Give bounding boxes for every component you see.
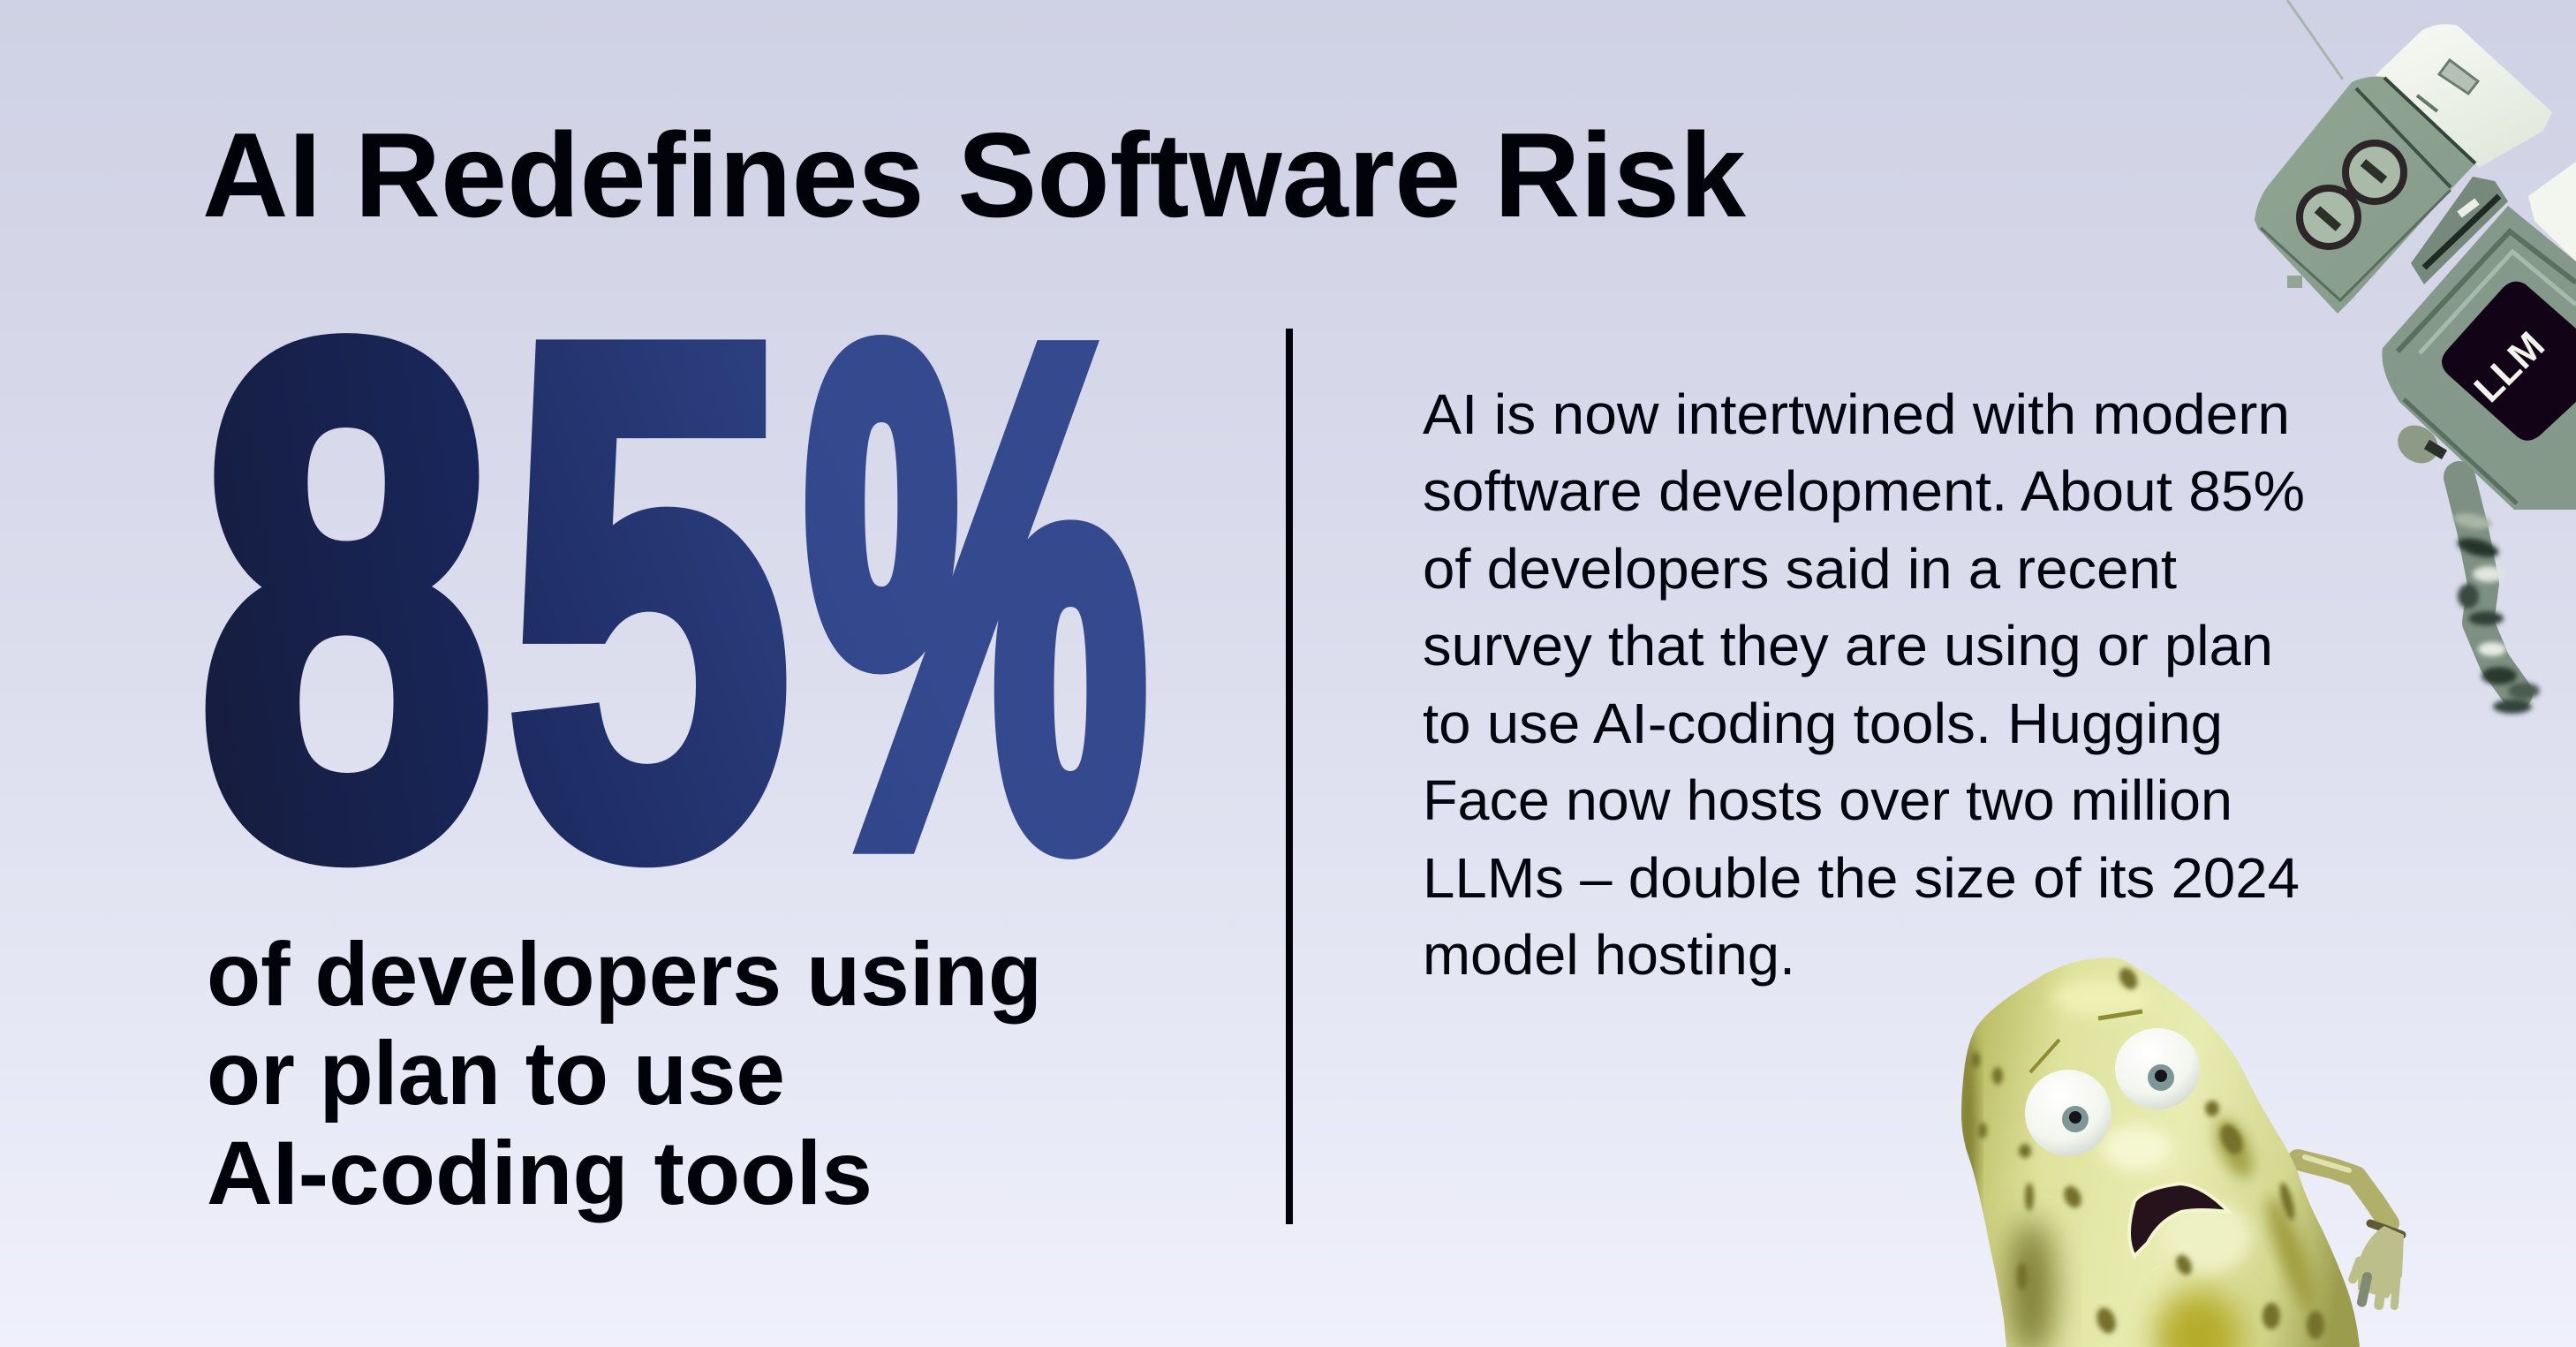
robot eye left [2300, 188, 2358, 246]
robot body top [2528, 162, 2576, 261]
robot head top [2376, 24, 2552, 168]
pickle eye left [2025, 1070, 2111, 1156]
subheading: of developers using or plan to use AI-coding tools: of developers using [207, 924, 1042, 1025]
body paragraph: LLMs – double the size of its 2024 [1423, 846, 2300, 910]
illustration: worried pickle [1943, 945, 2404, 1347]
robot body [2382, 206, 2576, 510]
body paragraph [1423, 382, 2305, 987]
big statistic: 85%: 8 [198, 197, 495, 1002]
title: AI Redefines Software Risk [202, 108, 1746, 242]
robot shoulder [2391, 418, 2445, 471]
LLM screen [2442, 282, 2576, 441]
big statistic: 85% [198, 197, 1146, 1002]
robot head face [2255, 77, 2475, 314]
pickle eye right [2115, 1028, 2200, 1109]
body paragraph: of developers said in a recent [1423, 537, 2177, 601]
LLM screen: LLM [2466, 323, 2553, 411]
body paragraph: model hosting. [1423, 923, 1795, 987]
pickle leg [2006, 1316, 2031, 1347]
body paragraph: to use AI-coding tools. Hugging [1423, 692, 2223, 755]
pickle arm [2298, 1157, 2389, 1223]
pickle wristband [2370, 1223, 2402, 1235]
subheading: of developers using or plan to use AI-coding tools: AI-coding tools [207, 1123, 873, 1223]
body paragraph: Face now hosts over two million [1423, 768, 2232, 832]
body paragraph: survey that they are using or plan [1423, 614, 2273, 677]
pickle hand [2347, 1226, 2404, 1311]
robot neck [2411, 177, 2508, 284]
subheading: of developers using or plan to use AI-coding tools: or plan to use [207, 1023, 785, 1124]
subheading: of developers using or plan to use AI-coding tools [207, 924, 1042, 1223]
big statistic: 85%: % [805, 207, 1146, 984]
big statistic: 85%: 5 [506, 197, 791, 1002]
divider line [1286, 329, 1293, 1224]
pickle eyebrow right [2098, 1011, 2142, 1018]
robot eye right [2346, 143, 2404, 201]
body paragraph: AI is now intertwined with modern [1423, 382, 2290, 446]
illustration: LLM robot [2255, 0, 2576, 714]
robot head tab [2287, 276, 2302, 288]
pickle mouth [2129, 1184, 2229, 1256]
pickle body [1961, 957, 2360, 1347]
pickle eyebrow left [2030, 1040, 2059, 1072]
robot antenna [2287, 0, 2343, 79]
robot arm [2452, 477, 2540, 714]
body paragraph: software development. About 85% [1423, 459, 2305, 523]
